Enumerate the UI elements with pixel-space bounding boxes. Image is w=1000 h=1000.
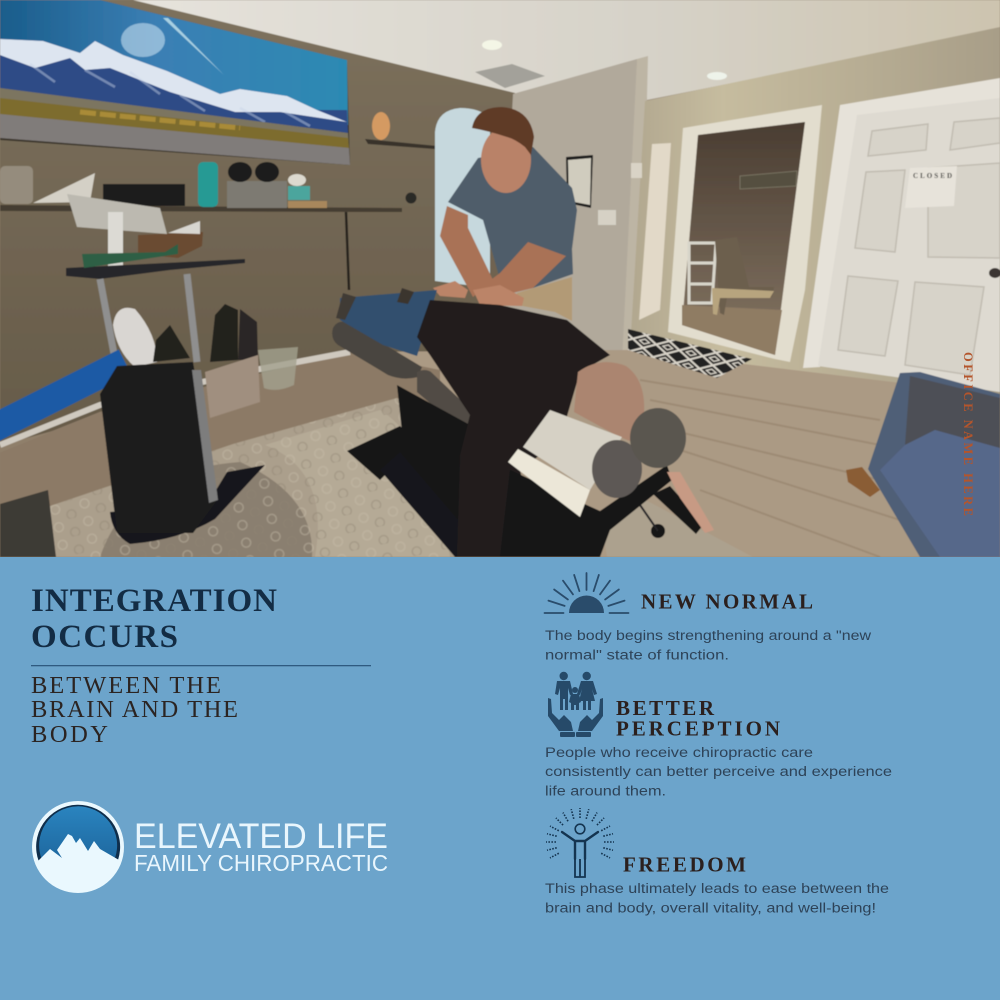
doctor right hand	[473, 285, 524, 306]
stand tabletop	[66, 259, 245, 279]
ceiling light: left	[482, 40, 502, 50]
painting foreground	[0, 114, 350, 165]
rug	[50, 398, 480, 557]
logo emblem	[32, 801, 124, 893]
thermostat	[406, 192, 416, 204]
wall shelf	[0, 205, 402, 212]
heading: better perception: BETTER	[616, 696, 715, 720]
painting snow	[0, 39, 347, 122]
dark room through doorway	[683, 122, 806, 311]
painting mountains	[0, 56, 349, 134]
room floor	[682, 305, 782, 355]
black bolster	[210, 304, 238, 362]
rocking chair	[715, 237, 774, 315]
subtitle	[31, 672, 238, 748]
item: freedom	[545, 808, 889, 916]
growth chart	[639, 143, 671, 320]
heading: better perception	[616, 696, 780, 740]
arched opening	[435, 108, 490, 288]
photo: chiropractor adjusting a patient in the office	[0, 0, 1000, 560]
painting golden trees	[0, 98, 349, 148]
pillar	[622, 56, 648, 364]
tan basket	[205, 355, 260, 418]
shelf item: tissue box	[288, 186, 310, 200]
painting plain	[0, 88, 349, 149]
body: new normal: normal" state of function.	[545, 648, 729, 662]
laptop	[67, 194, 167, 234]
door	[818, 98, 1000, 392]
shelf item: tissues	[288, 174, 306, 186]
face cradle black hardware	[500, 465, 672, 557]
wall outlet	[631, 163, 642, 178]
item: better perception	[545, 672, 892, 798]
door knob	[989, 268, 1000, 278]
block bottom left	[0, 490, 56, 557]
door panels	[838, 118, 1000, 375]
title	[31, 583, 277, 655]
shelf item: dark bag	[255, 162, 279, 182]
changing table	[689, 243, 716, 303]
painting gold highlights	[80, 112, 240, 128]
small shelf	[365, 139, 437, 149]
office name vertical label: OFFICE NAME HERE	[961, 352, 975, 516]
left wall	[0, 0, 520, 445]
ceiling light: right	[707, 72, 727, 80]
body: new normal: The body begins strengthening around a "new	[545, 628, 871, 643]
shelf item: dark bags	[228, 162, 252, 182]
paper roll	[508, 449, 590, 517]
armchair	[868, 372, 1000, 557]
closed sign	[905, 166, 957, 208]
patient arm	[667, 472, 714, 533]
item: new normal	[544, 573, 871, 662]
body: better perception: consistently can better perceive and experience	[545, 764, 892, 779]
speaker body	[100, 362, 217, 533]
subtitle: BETWEEN THE	[31, 672, 221, 699]
shelf item: water bottle	[198, 162, 218, 207]
floor: left darker side	[0, 352, 440, 506]
table torso cushion	[417, 370, 471, 428]
white cloth	[168, 221, 200, 234]
title: OCCURS	[31, 619, 178, 655]
ceiling	[130, 0, 1000, 100]
cord	[346, 212, 349, 290]
light switch	[598, 210, 616, 225]
painting frame	[0, 68, 350, 162]
paper on headrest	[523, 410, 622, 490]
wire basket	[258, 347, 298, 390]
doctor face	[481, 127, 531, 193]
rug medallion darker ring	[100, 462, 312, 557]
patient shirt	[417, 300, 610, 557]
face cushion right	[630, 408, 686, 468]
left column: headline block	[31, 583, 371, 748]
arm rest	[653, 486, 704, 534]
speaker base	[110, 465, 265, 544]
back wall by the pillar	[500, 59, 637, 362]
closed sign heading: CLOSED	[913, 172, 952, 180]
slipper	[846, 467, 880, 497]
green tray	[82, 244, 178, 268]
body: better perception: life around them.	[545, 784, 666, 798]
patient shoe far	[397, 288, 414, 304]
patient jeans	[340, 290, 437, 356]
right wall	[630, 27, 1000, 400]
face cushion left	[592, 440, 642, 498]
white pillow	[113, 308, 157, 367]
logo wordmark: ELEVATED LIFE	[134, 817, 388, 856]
room sign	[740, 171, 797, 189]
title: INTEGRATION	[31, 583, 277, 619]
body: freedom: This phase ultimately leads to ease between the	[545, 881, 889, 896]
heading: freedom: FREEDOM	[623, 852, 746, 876]
logo wordmark: FAMILY CHIROPRACTIC	[134, 850, 388, 876]
painting streak	[163, 18, 224, 75]
shelf item: patterned cushion	[0, 166, 33, 204]
table rail	[380, 452, 490, 557]
table black base	[397, 385, 520, 557]
subtitle: BRAIN AND THE	[31, 696, 238, 723]
picture paper	[568, 158, 591, 205]
patterned floor mat	[628, 329, 752, 378]
doctor hair	[472, 107, 534, 155]
icon: family in hands	[548, 672, 603, 737]
khaki pants	[517, 277, 572, 321]
rug light ring	[265, 410, 450, 557]
doctor right arm	[480, 242, 566, 296]
body: better perception	[545, 745, 892, 798]
patient head	[574, 362, 644, 444]
shelf item: book	[33, 173, 95, 203]
black wedge cushion	[153, 325, 190, 362]
heading: better perception: PERCEPTION	[616, 716, 780, 740]
wall picture	[566, 155, 593, 208]
floor plank lines: right	[640, 380, 900, 557]
foam roller	[0, 362, 125, 430]
subtitle: BODY	[31, 721, 108, 748]
body: freedom: brain and body, overall vitality, and well-being!	[545, 900, 876, 916]
rug pattern overlay	[50, 398, 480, 557]
doctor left hand	[433, 281, 468, 298]
laptop stand	[108, 212, 123, 270]
rug right piece	[600, 497, 753, 557]
icon: rising sun	[544, 573, 628, 613]
painting snow streaks	[30, 64, 310, 126]
heading: new normal: NEW NORMAL	[641, 590, 813, 614]
table leg cushion	[332, 322, 422, 379]
adjustment knob	[651, 524, 665, 538]
body: better perception: People who receive chiropractic care	[545, 745, 813, 760]
chair seat	[712, 288, 774, 315]
logo: Elevated Life Family Chiropractic	[32, 801, 388, 893]
shelf item: tray	[288, 201, 327, 208]
stand poles	[100, 274, 197, 370]
floor	[396, 350, 920, 557]
speaker side pole	[192, 370, 218, 503]
patient shoe	[336, 293, 356, 320]
knob stem	[640, 505, 658, 531]
shelf item: black case	[103, 184, 185, 206]
doctor left arm	[440, 206, 493, 297]
shelf item: basket	[227, 181, 287, 208]
door frame	[803, 78, 1000, 368]
photo base	[0, 0, 1000, 560]
doorway frame	[668, 105, 822, 362]
body: new normal	[545, 628, 871, 662]
bowl	[138, 232, 203, 258]
black bolster	[238, 309, 258, 360]
salt lamp	[372, 112, 390, 140]
baseboard	[0, 352, 350, 445]
air vent	[475, 64, 545, 88]
painting sky	[0, 0, 348, 125]
logo wordmark	[134, 817, 388, 876]
body: freedom	[545, 881, 889, 916]
painting sun glow	[121, 23, 165, 57]
doctor shirt	[448, 147, 577, 290]
table foot frame	[347, 426, 420, 480]
icon: person with raised arms	[546, 808, 614, 877]
